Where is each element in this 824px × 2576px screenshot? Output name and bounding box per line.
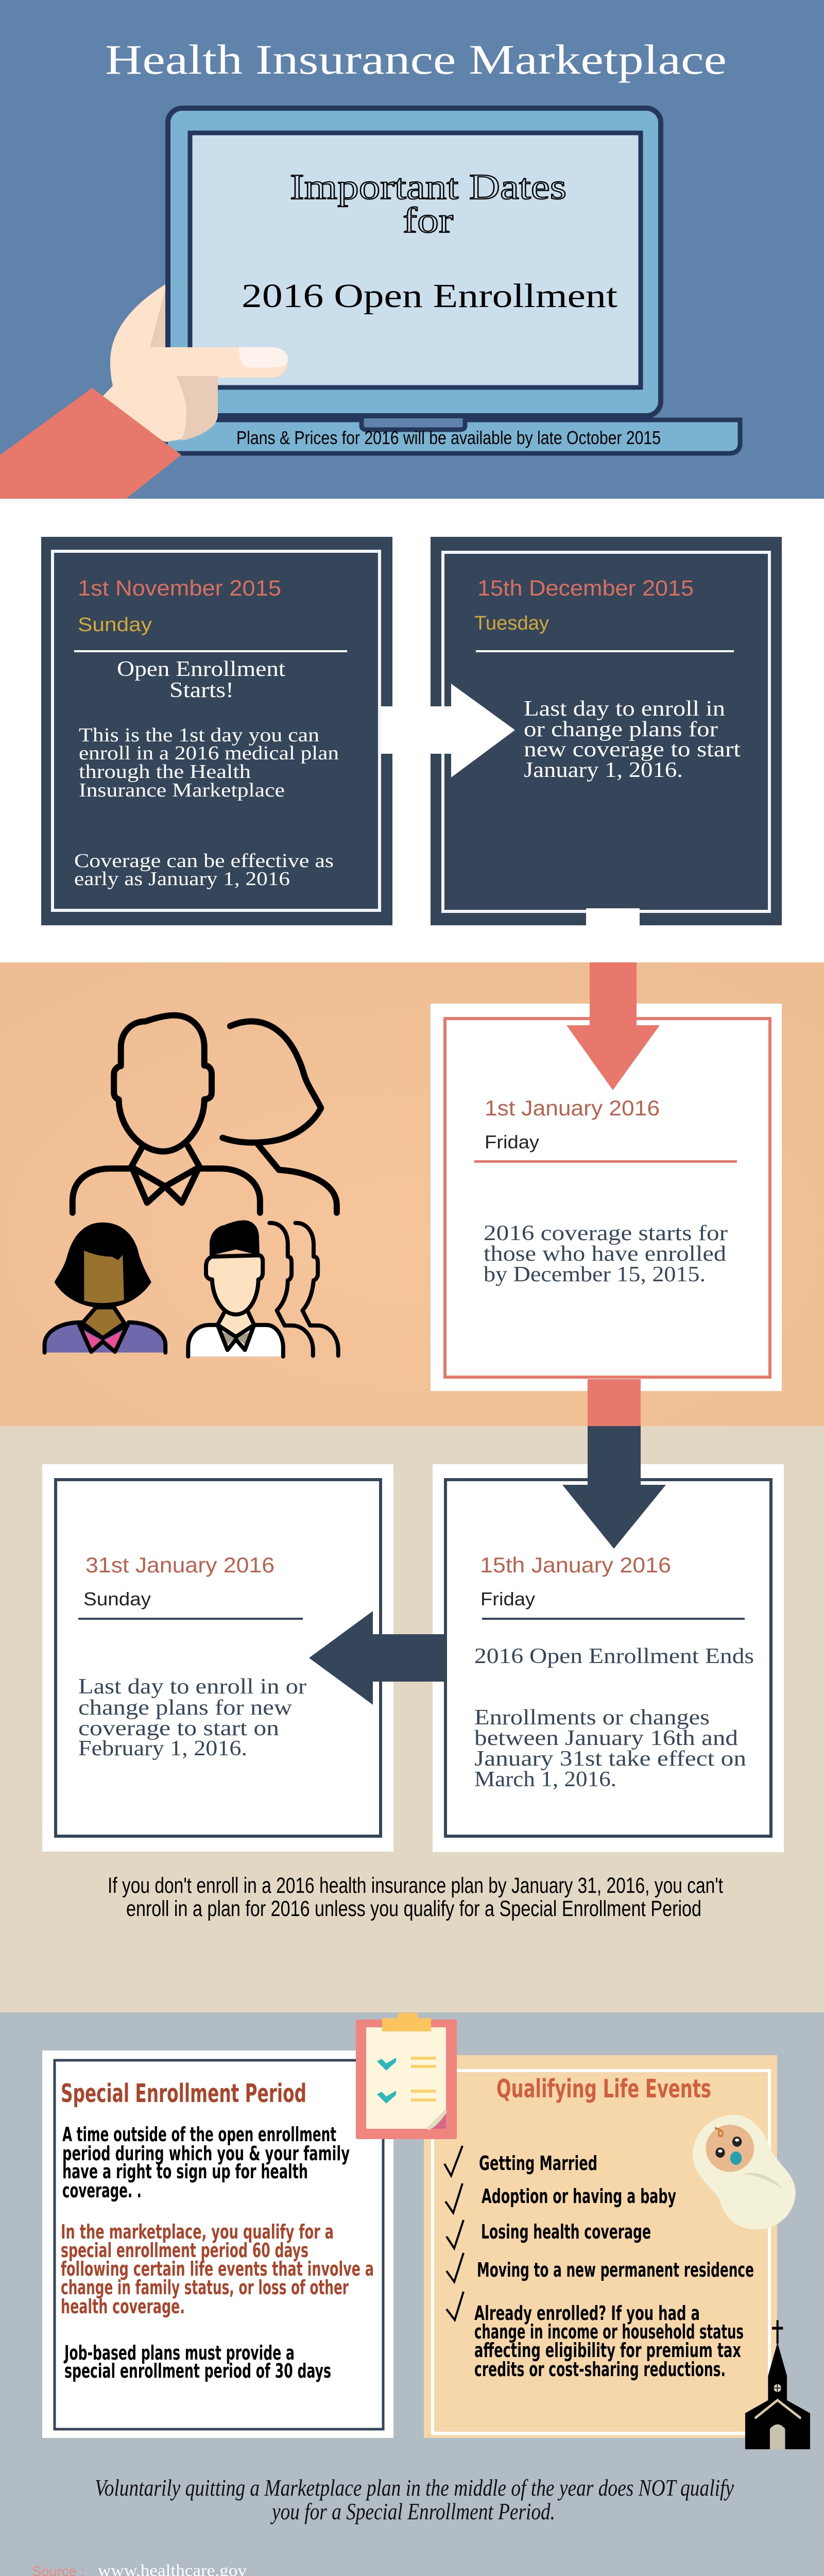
text block: Coverage can be effective as [74, 850, 334, 872]
text block: following certain life events that involve a [61, 2258, 374, 2280]
text block [63, 2342, 331, 2382]
text block [74, 850, 334, 890]
text block: This is the 1st day you can [79, 724, 319, 746]
text block: or change plans for [524, 718, 718, 741]
text block: health coverage. [61, 2295, 185, 2318]
panel: special enrollment section [0, 2012, 824, 2576]
text block: A time outside of the open enrollment [62, 2123, 336, 2146]
panel: qualifying life events [424, 2055, 777, 2438]
list of events: Getting Married [479, 2152, 597, 2175]
text block: Enrollments or changes [474, 1706, 710, 1730]
text block: through the Health [79, 761, 251, 783]
text block [62, 2123, 350, 2202]
arrow: red connector [588, 1379, 641, 1426]
list of events: Already enrolled? If you had a [474, 2302, 700, 2325]
date: 15th January 2016 [480, 1553, 671, 1577]
icon: check marks [444, 2146, 464, 2320]
icon: swaddled baby [693, 2115, 796, 2230]
text: voluntary quitting note [95, 2475, 734, 2524]
heading: Open Enrollment [117, 657, 285, 681]
arrow: dark down [562, 1426, 666, 1549]
date: 15th December 2015 [477, 576, 694, 601]
text block: coverage to start on [78, 1717, 279, 1740]
text: important dates: Important Dates [290, 167, 566, 207]
arrow: red down [566, 962, 660, 1090]
text block: new coverage to start [524, 738, 741, 761]
text block: February 1, 2016. [78, 1737, 247, 1760]
text: plans and prices: Plans & Prices for 2016 will be available by late October 2015 [236, 427, 661, 448]
text block: by December 15, 2015. [484, 1263, 706, 1286]
date: 1st January 2016 [485, 1096, 660, 1120]
text block [79, 724, 339, 801]
weekday: Friday [480, 1588, 535, 1609]
icon: church [745, 2320, 810, 2449]
list of events: Losing health coverage [481, 2221, 651, 2243]
panel: header [0, 0, 824, 499]
text block: between January 16th and [474, 1726, 738, 1750]
text block: change plans for new [78, 1696, 293, 1720]
heading [117, 657, 285, 702]
text block: In the marketplace, you qualify for a [61, 2221, 334, 2243]
weekday: Tuesday [474, 613, 549, 634]
heading: Special Enrollment Period [61, 2079, 306, 2108]
text block: January 1, 2016. [524, 758, 683, 782]
panel: 15th January 2016 [433, 1464, 784, 1852]
arrow: white right [381, 684, 515, 777]
date: 31st January 2016 [85, 1553, 274, 1577]
text: enrollment note [108, 1873, 723, 1921]
text block: special enrollment period of 30 days [64, 2360, 331, 2382]
panel: 31st January 2016 [42, 1464, 393, 1852]
panel: January deadlines section [0, 1426, 824, 2012]
panel: 1st January 2016 [431, 1004, 782, 1391]
icon: man with white shirt [188, 1221, 283, 1357]
text block: have a right to sign up for health [62, 2160, 308, 2183]
text block: Job-based plans must provide a [63, 2342, 295, 2364]
text block: 2016 coverage starts for [484, 1222, 728, 1245]
panel: timeline white section [0, 499, 824, 962]
panel: 1st January section [0, 962, 824, 1426]
text block: Last day to enroll in [524, 697, 725, 721]
list of events: Adoption or having a baby [482, 2185, 676, 2208]
text block [524, 697, 741, 782]
panel: 1st November 2015 [41, 537, 392, 925]
text: source [32, 2562, 247, 2576]
date: 1st November 2015 [78, 576, 281, 601]
text block: Insurance Marketplace [79, 779, 285, 801]
weekday: Sunday [78, 614, 152, 636]
weekday: Sunday [83, 1588, 151, 1609]
list of events [474, 2152, 754, 2381]
panel: 15th December 2015 [431, 537, 782, 925]
icon: adult woman outline [222, 1021, 337, 1213]
text block: coverage. . [62, 2179, 142, 2202]
text block: special enrollment period 60 days [61, 2239, 308, 2262]
title: Health Insurance Marketplace [105, 36, 727, 83]
text block [78, 1675, 306, 1760]
text block: early as January 1, 2016 [74, 868, 290, 890]
heading: 2016 Open Enrollment Ends [474, 1645, 754, 1668]
text block: January 31st take effect on [474, 1747, 746, 1771]
icon: background silhouettes [269, 1223, 338, 1355]
heading: Qualifying Life Events [496, 2074, 711, 2104]
arrow: white connector [586, 908, 640, 962]
text block: March 1, 2016. [474, 1768, 616, 1791]
icon: clipboard [356, 2013, 457, 2139]
arrow: dark left [309, 1611, 444, 1705]
text: important dates [290, 167, 566, 241]
text block: period during which you & your family [62, 2142, 350, 2165]
text block: Last day to enroll in or [78, 1675, 306, 1699]
icon: pointing hand [0, 284, 288, 499]
icon: family group [45, 1015, 338, 1357]
text: important dates: for [403, 201, 453, 241]
text: open enrollment: 2016 Open Enrollment [242, 277, 617, 315]
text block: change in family status, or loss of other [61, 2276, 349, 2299]
text block [61, 2221, 374, 2318]
heading: Starts! [169, 679, 234, 702]
icon: woman with purple suit [45, 1223, 165, 1352]
text block [484, 1222, 728, 1286]
icon: laptop [165, 108, 740, 453]
text block [474, 1706, 746, 1791]
text block: those who have enrolled [484, 1242, 726, 1266]
text: voluntary quitting note: you for a Special Enrollment Period. [270, 2498, 555, 2524]
icon: adult man outline [73, 1015, 260, 1213]
panel: special enrollment period [42, 2050, 393, 2438]
weekday: Friday [485, 1131, 539, 1153]
text block: enroll in a 2016 medical plan [79, 742, 339, 764]
